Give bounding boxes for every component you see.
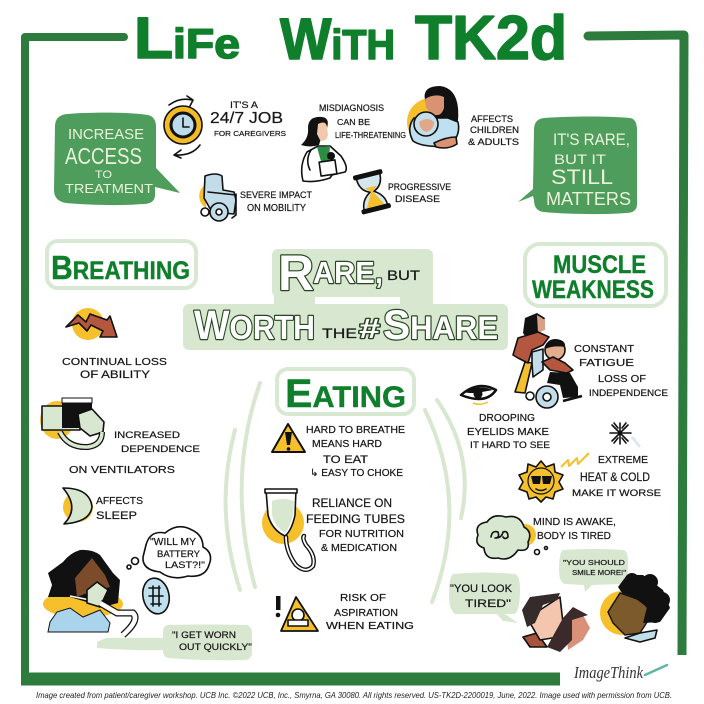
icon: wheelchair [199,174,236,221]
icon: thought cloud will my battery last [127,527,211,578]
title [134,4,567,73]
title: WiTH [280,7,395,72]
icon: battery [140,576,172,616]
text: misdiagnosis: CAN BE [337,117,370,127]
text: affects children and adults [468,114,519,147]
icon: drooping eye [461,386,496,404]
banner: rare but worth the share: WORTH [194,302,315,348]
text: 24/7 job [210,100,286,138]
text: hard to breathe means hard to eat: TO EAT [323,454,368,466]
text: drooping eyelids: DROOPING [479,413,535,424]
icon: moon [63,488,93,524]
signature: ImageThink: ImageThink [573,663,643,682]
text: mind is awake body is tired: MIND IS AWAKE, [533,517,616,528]
callout: you should smile more [559,549,628,592]
icon: aspiration risk skull [276,596,318,631]
text: extreme heat and cold: HEAT & COLD [580,472,650,484]
text: increased dependence on ventilators: INCREASED [114,430,180,441]
text: affects sleep: AFFECTS [96,495,143,507]
text: hard to breathe means hard to eat: HARD TO BREATHE [306,425,405,436]
callout: it's rare but it still matters: BUT IT [554,151,607,167]
text: constant fatigue loss of independence: LOSS OF [598,373,646,385]
text: reliance on feeding tubes: FEEDING TUBES [306,512,405,526]
text: severe impact on mobility [240,190,312,214]
text: reliance on feeding tubes: & MEDICATION [321,543,397,554]
icon: doctor [301,117,346,182]
text: constant fatigue loss of independence [574,344,668,398]
text: misdiagnosis: MISDIAGNOSIS [319,103,384,113]
text: risk of aspiration when eating: ASPIRATION [334,608,398,619]
text: misdiagnosis [319,103,406,140]
callout: increase access: ACCESS [65,143,142,169]
title: TK2d [415,4,567,73]
text: constant fatigue loss of independence: CONSTANT [574,344,634,355]
text: reliance on feeding tubes: FOR NUTRITION [319,529,404,540]
text: drooping eyelids: IT HARD TO SEE [470,440,550,450]
callout: you look tired: TIRED" [465,598,511,610]
text: 24/7 job: IT'S A [230,100,258,110]
text: severe impact on mobility: SEVERE IMPACT [240,190,312,200]
icon: snowflake [610,423,640,447]
callout: increase access: TREATMENT [65,181,153,196]
callout: it's rare but it still matters: IT'S RARE, [553,130,630,149]
icon: heat zigzag [561,453,589,467]
icon: two people facing [522,593,590,652]
text: continual loss of ability: OF ABILITY [80,369,151,381]
icon: clock [164,96,202,158]
callout: increase access: INCREASE [68,126,144,143]
text: increased dependence on ventilators: ON VENTILATORS [69,465,175,476]
text: risk of aspiration when eating [326,593,414,632]
title: LiFe [134,6,240,71]
callout: increase access [54,113,180,205]
callout: you should smile more: "YOU SHOULD [563,558,626,567]
text: continual loss of ability [62,356,167,381]
icon: declining arrow [66,308,117,340]
heading: muscle weakness: WEAKNESS [532,276,654,304]
icon: woman with curly hair [600,573,670,642]
text: 24/7 job: 24/7 JOB [210,110,283,127]
icon: ventilator [40,398,104,447]
text: mind is awake body is tired: BODY IS TIRED [537,531,611,542]
icon: hourglass [353,169,391,215]
icon: thought cloud will my battery last: "WILL MY [150,537,196,548]
icon: thought cloud will my battery last: LAST?!" [165,560,205,571]
heading: breathing: BREATHING [51,249,190,286]
decorative arcs around eating [226,383,465,602]
icon: caregiver with wheelchair user [513,313,582,408]
text: severe impact on mobility: ON MOBILITY [247,203,306,214]
text: progressive disease: PROGRESSIVE [388,182,451,192]
text: increased dependence on ventilators [69,430,200,476]
text: hard to breathe means hard to eat: ↳ EASY TO CHOKE [310,468,403,479]
text: risk of aspiration when eating: RISK OF [340,593,386,604]
text: 24/7 job: FOR CAREGIVERS [214,129,286,138]
icon: woman with breathing mask [43,550,135,635]
callout: you should smile more: SMILE MORE!" [572,568,626,577]
callout: i get worn out quickly [97,624,252,660]
text: progressive disease: DISEASE [395,194,440,204]
text: constant fatigue loss of independence: INDEPENDENCE [589,388,668,398]
callout: i get worn out quickly: "I GET WORN [172,630,236,641]
banner: rare but worth the share: ARE, [313,255,383,290]
icon: sun with sunglasses [519,461,563,502]
text: extreme heat and cold: EXTREME [598,455,648,466]
text: affects sleep [96,495,143,522]
banner: rare but worth the share: THE [322,325,357,341]
callout: it's rare but it still matters [518,116,637,214]
text: reliance on feeding tubes: RELIANCE ON [312,496,392,510]
text: hard to breathe means hard to eat [306,425,405,479]
text: extreme heat and cold: MAKE IT WORSE [572,488,661,499]
banner: rare but worth the share: SHARE [383,301,498,348]
text: drooping eyelids [467,413,550,450]
text: extreme heat and cold [572,455,661,499]
icon: warning triangle [272,424,305,452]
text: mind is awake body is tired [533,517,616,542]
text: risk of aspiration when eating: WHEN EATING [326,621,414,632]
callout: increase access: TO [95,169,112,181]
callout: you look tired: "YOU LOOK [450,583,513,595]
icon: thought cloud will my battery last: BATTERY [157,549,201,560]
text: misdiagnosis: LIFE-THREATENING [335,130,406,140]
text: reliance on feeding tubes [306,496,405,554]
banner: rare but worth the share: BUT [387,267,421,283]
heading: muscle weakness: MUSCLE [553,251,646,279]
heading: muscle weakness [525,244,666,306]
banner: rare but worth the share: R [278,245,314,301]
text: progressive disease [388,182,451,204]
icon: feeding tube bag [262,489,314,570]
icon: tired thought cloud [477,516,548,559]
text: affects children and adults: AFFECTS [471,114,513,124]
text: increased dependence on ventilators: DEPENDENCE [121,444,200,455]
callout: it's rare but it still matters: MATTERS [546,189,631,209]
text: hard to breathe means hard to eat: MEANS HARD [312,439,382,450]
callout: it's rare but it still matters: STILL [551,166,613,189]
text: continual loss of ability: CONTINUAL LOSS [62,356,167,368]
text: affects sleep: SLEEP [96,510,137,522]
text: constant fatigue loss of independence: FATIGUE [579,357,634,369]
icon: mother and child [407,86,459,148]
text: affects children and adults: & ADULTS [468,137,519,147]
heading: eating: EATING [285,372,406,416]
text: affects children and adults: CHILDREN [470,125,519,135]
callout: you look tired [449,572,520,623]
banner: rare but worth the share: # [359,313,381,344]
text: drooping eyelids: EYELIDS MAKE [467,427,549,438]
callout: i get worn out quickly: OUT QUICKLY" [179,642,252,653]
banner: rare but worth the share [183,245,508,350]
